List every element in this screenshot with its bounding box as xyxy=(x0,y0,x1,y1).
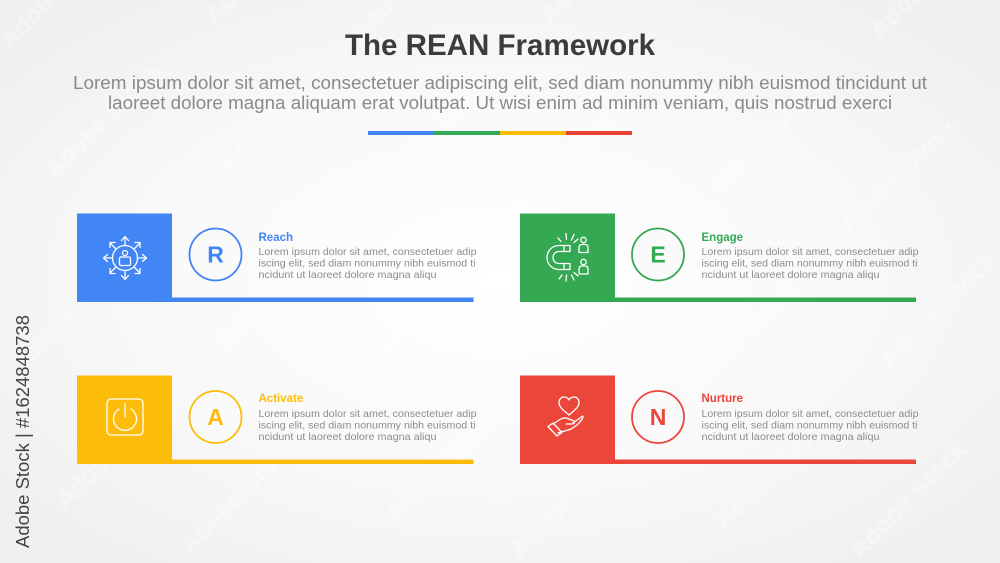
panel: Reach xyxy=(77,214,477,302)
body text: Reach: ncidunt ut laoreet dolore magna aliqu xyxy=(258,270,436,281)
text: Adobe Stock xyxy=(369,66,497,194)
colour block and underline: Activate xyxy=(77,376,474,464)
heading: Activate: Activate xyxy=(258,393,303,405)
body text: Activate: ncidunt ut laoreet dolore magna aliqu xyxy=(258,432,436,443)
intro paragraph xyxy=(73,73,927,113)
text: Adobe Stock xyxy=(339,266,467,394)
text: Adobe Stock xyxy=(504,436,632,563)
four-colour divider xyxy=(368,131,632,135)
icon: person with outward arrows xyxy=(104,236,146,280)
body text: Engage xyxy=(702,247,919,281)
text: Adobe Stock xyxy=(39,56,167,184)
letter badge: E xyxy=(632,228,684,280)
text: Adobe Stock xyxy=(504,91,632,219)
body text: Engage: ncidunt ut laoreet dolore magna aliqu xyxy=(702,270,880,281)
letter badge: R xyxy=(190,228,242,280)
body text: Reach: iscing elit, sed diam nonummy nibh euismod ti xyxy=(258,258,476,270)
text: Adobe Stock xyxy=(174,431,302,559)
text: Adobe Stock xyxy=(674,276,802,404)
body text: Engage: iscing elit, sed diam nonummy nibh euismod ti xyxy=(702,258,918,270)
letter badge: A xyxy=(190,391,242,443)
letter badge: E: E xyxy=(650,242,666,268)
icon: power button xyxy=(107,399,143,435)
icon: magnet attracting people xyxy=(547,234,588,281)
text: Adobe Stock xyxy=(9,246,137,374)
text: Adobe Stock xyxy=(169,96,297,224)
text: Adobe Stock xyxy=(704,71,832,199)
body text: Reach: Lorem ipsum dolor sit amet, consectetuer adip xyxy=(258,247,477,258)
title: The REAN Framework xyxy=(345,29,655,62)
text: Adobe Stock xyxy=(49,386,177,514)
letter badge: N: N xyxy=(650,404,666,430)
heading: Nurture: Nurture xyxy=(702,393,743,405)
letter badge: N xyxy=(632,391,684,443)
heading: Reach: Reach xyxy=(258,232,293,244)
colour block and underline: Engage xyxy=(520,214,916,302)
text: Adobe Stock xyxy=(379,401,507,529)
body text: Activate: iscing elit, sed diam nonummy nibh euismod ti xyxy=(258,420,476,432)
letter badge: R: R xyxy=(207,242,224,268)
colour block and underline: Reach xyxy=(77,214,474,302)
colour block and underline: Nurture xyxy=(520,376,916,464)
body text: Nurture xyxy=(702,409,919,443)
letter badge: A: A xyxy=(207,404,224,430)
panel: Nurture xyxy=(520,376,919,464)
stock credit: Adobe Stock | #1624848738 xyxy=(12,315,33,548)
heading: Engage: Engage xyxy=(702,232,743,244)
text: Adobe Stock xyxy=(539,236,667,364)
body text: Nurture: ncidunt ut laoreet dolore magna aliqu xyxy=(702,432,880,443)
text: Adobe Stock xyxy=(834,111,962,239)
panel: Engage xyxy=(520,214,919,302)
body text: Nurture: iscing elit, sed diam nonummy nibh euismod ti xyxy=(702,420,918,432)
intro paragraph: laoreet dolore magna aliquam erat volutpat. Ut wisi enim ad minim veniam, quis nostrud exerci xyxy=(108,93,892,113)
panel: Activate xyxy=(77,376,477,464)
intro paragraph: Lorem ipsum dolor sit amet, consectetuer adipiscing elit, sed diam nonummy nibh euismod tincidunt ut xyxy=(73,73,927,93)
text: Adobe Stock xyxy=(874,246,1000,374)
body text: Reach xyxy=(258,247,477,281)
body text: Activate: Lorem ipsum dolor sit amet, consectetuer adip xyxy=(258,409,477,420)
text: Adobe Stock xyxy=(844,436,972,563)
text: Adobe Stock xyxy=(209,226,337,354)
body text: Engage: Lorem ipsum dolor sit amet, consectetuer adip xyxy=(702,247,919,258)
text: Adobe Stock xyxy=(709,406,837,534)
icon: hand holding heart xyxy=(548,397,583,436)
body text: Nurture: Lorem ipsum dolor sit amet, consectetuer adip xyxy=(702,409,919,420)
body text: Activate xyxy=(258,409,477,443)
